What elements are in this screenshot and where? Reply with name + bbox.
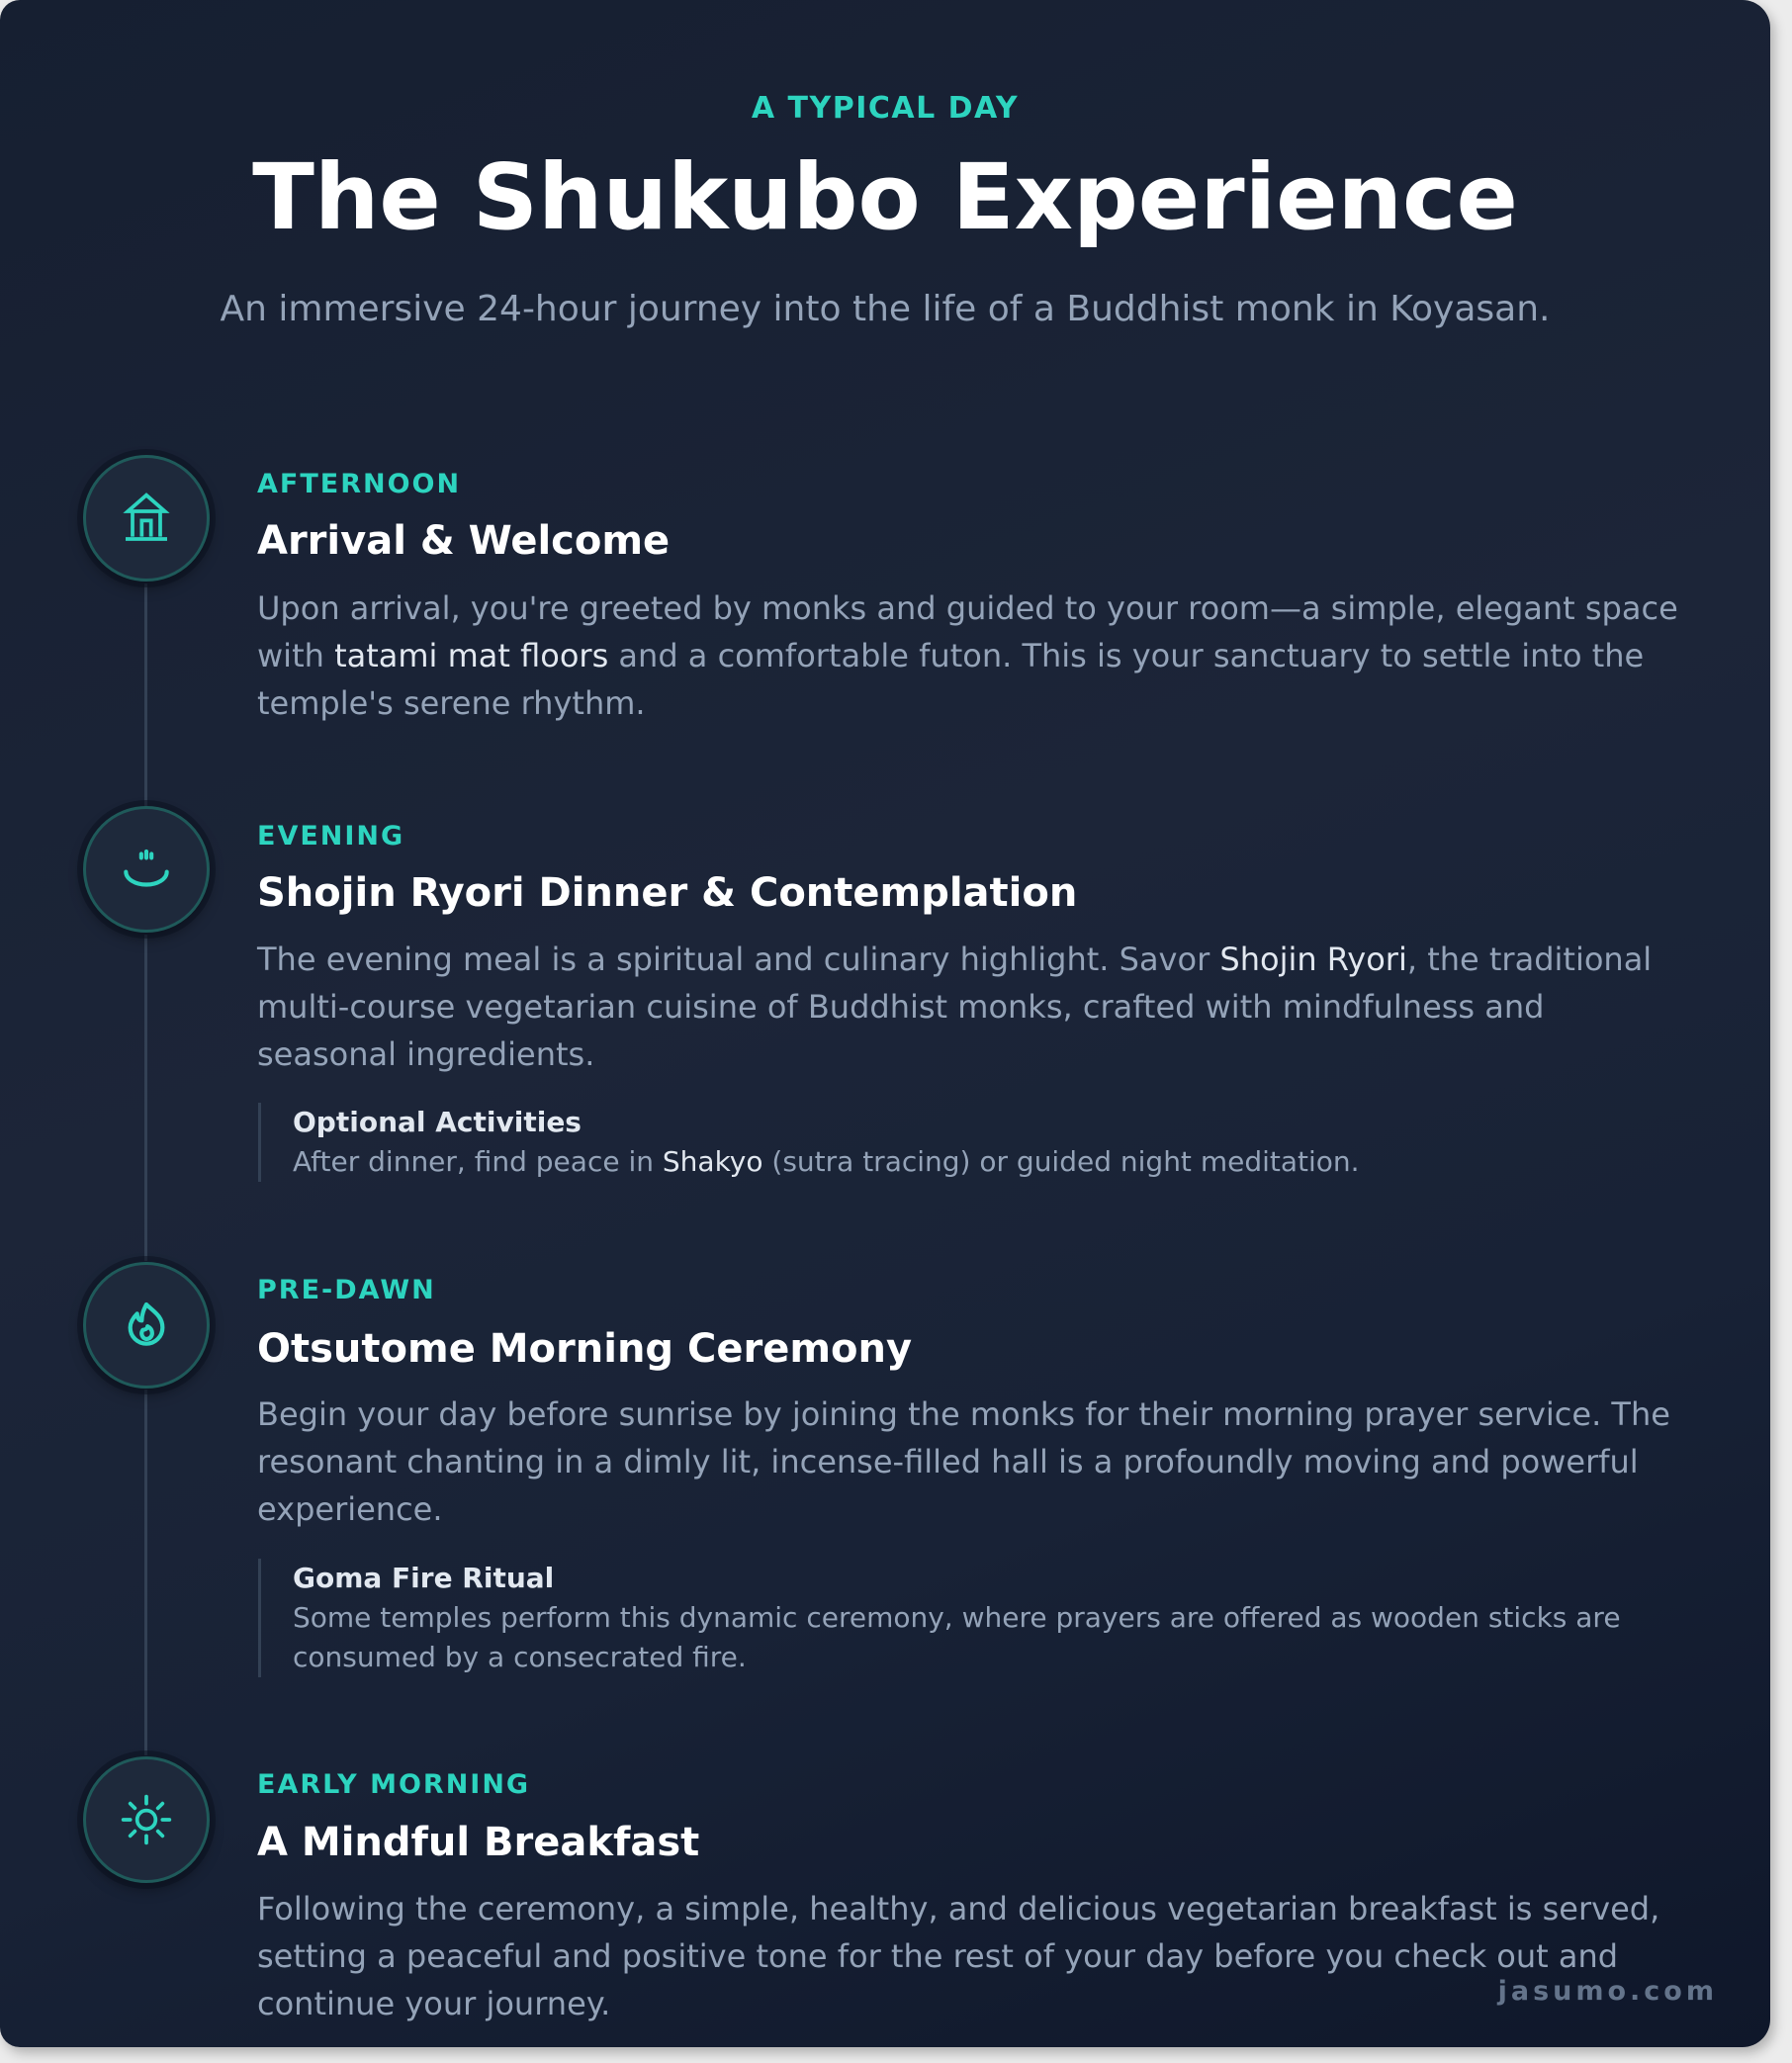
callout: goma: Goma Fire Ritual bbox=[293, 1562, 554, 1594]
kicker: early morning: EARLY MORNING bbox=[257, 1769, 530, 1800]
text: arrival bbox=[257, 589, 1678, 722]
icon: flame bbox=[83, 1262, 210, 1389]
callout: goma: consumed by a consecrated fire. bbox=[293, 1641, 747, 1673]
title: The Shukubo Experience bbox=[252, 144, 1518, 250]
icon: sun bbox=[83, 1756, 210, 1883]
text: breakfast: setting a peaceful and positive tone for the rest of your day before you check out and bbox=[257, 1937, 1618, 1975]
text: dinner bbox=[257, 941, 1652, 1073]
heading: breakfast: A Mindful Breakfast bbox=[257, 1820, 699, 1865]
text: dinner: multi-course vegetarian cuisine of Buddhist monks, crafted with mindfulness and bbox=[257, 988, 1544, 1026]
kicker: evening: EVENING bbox=[257, 821, 404, 852]
kicker: A TYPICAL DAY bbox=[752, 91, 1019, 126]
text: ceremony: resonant chanting in a dimly lit, incense-filled hall is a profoundly moving and powerful bbox=[257, 1443, 1639, 1480]
heading: arrival: Arrival & Welcome bbox=[257, 518, 670, 564]
text: ceremony: experience. bbox=[257, 1490, 443, 1528]
text: breakfast: Following the ceremony, a simple, healthy, and delicious vegetarian breakfast is served, bbox=[257, 1890, 1659, 1928]
text: breakfast bbox=[257, 1890, 1659, 2022]
callout: optional activities bbox=[258, 1103, 1360, 1182]
text: breakfast: continue your journey. bbox=[257, 1985, 610, 2022]
text: dinner: The evening meal is a spiritual and culinary highlight. Savor Shojin Ryori, the traditional bbox=[257, 941, 1652, 978]
callout: goma bbox=[258, 1559, 1621, 1677]
subtitle: An immersive 24-hour journey into the life of a Buddhist monk in Koyasan. bbox=[220, 289, 1551, 329]
watermark: jasumo.com bbox=[1498, 1976, 1718, 2007]
callout: optional activities: After dinner, find peace in Shakyo (sutra tracing) or guided night meditation. bbox=[293, 1145, 1360, 1178]
kicker: afternoon: AFTERNOON bbox=[257, 469, 461, 499]
callout: optional activities: Optional Activities bbox=[293, 1106, 582, 1138]
text: arrival: Upon arrival, you're greeted by monks and guided to your room—a simple, elegant space bbox=[257, 589, 1678, 627]
heading: ceremony: Otsutome Morning Ceremony bbox=[257, 1326, 912, 1372]
heading: dinner: Shojin Ryori Dinner & Contemplation bbox=[257, 870, 1077, 916]
icon: temple bbox=[83, 455, 210, 582]
text: arrival: with tatami mat floors and a comfortable futon. This is your sanctuary to settle into the bbox=[257, 637, 1644, 674]
text: ceremony: Begin your day before sunrise by joining the monks for their morning prayer service. The bbox=[257, 1395, 1670, 1433]
icon: bowl bbox=[83, 806, 210, 933]
text: arrival: temple's serene rhythm. bbox=[257, 684, 646, 722]
callout: goma: Some temples perform this dynamic ceremony, where prayers are offered as wooden sticks are bbox=[293, 1601, 1621, 1634]
text: dinner: seasonal ingredients. bbox=[257, 1035, 594, 1073]
kicker: pre-dawn: PRE-DAWN bbox=[257, 1275, 436, 1305]
text: ceremony bbox=[257, 1395, 1670, 1528]
